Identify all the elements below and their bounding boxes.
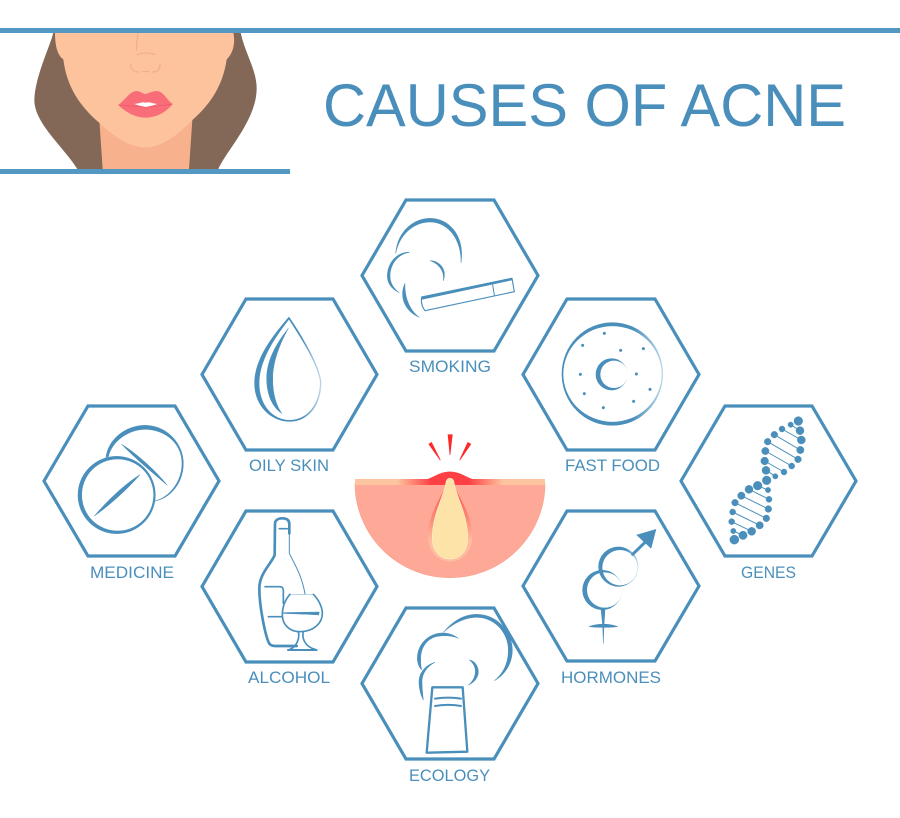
- icon: DNA helix: [729, 417, 805, 544]
- icon: gender symbols: [582, 529, 656, 643]
- icon: donut: [562, 322, 663, 426]
- icon: factory chimney and smoke: [417, 614, 512, 753]
- label: MEDICINE: [90, 563, 174, 582]
- header: portrait of face: [34, 33, 257, 169]
- label: ALCOHOL: [248, 668, 330, 687]
- pus: [432, 478, 468, 559]
- icon: pills: [78, 425, 183, 534]
- label: FAST FOOD: [565, 456, 660, 475]
- header lower rule: [0, 169, 290, 174]
- nose: [131, 33, 160, 72]
- top rule: [0, 28, 900, 33]
- panel: genes: [681, 406, 856, 582]
- panel: alcohol: [202, 511, 377, 687]
- panel: hormones: [523, 511, 699, 687]
- skin body: [355, 483, 545, 578]
- follicle: [428, 477, 472, 562]
- panel: smoking: [362, 200, 538, 376]
- icon: bottle and glass: [259, 518, 322, 650]
- label: HORMONES: [561, 668, 661, 687]
- icon: oil drop: [254, 317, 321, 422]
- skin surface band: [355, 479, 545, 485]
- panel: oily skin: [202, 299, 377, 475]
- central illustration: inflamed pimple cross-section: [355, 434, 545, 578]
- face: [55, 33, 234, 147]
- panel: fast food: [523, 299, 699, 475]
- neck: [99, 120, 192, 169]
- panel: medicine: [44, 406, 219, 582]
- pain rays: [428, 434, 471, 460]
- label: ECOLOGY: [409, 766, 490, 785]
- label: SMOKING: [409, 357, 491, 376]
- hair: [34, 33, 257, 169]
- bump: [427, 472, 473, 479]
- label: GENES: [741, 563, 796, 582]
- panel: ecology: [362, 608, 538, 785]
- icon: cigarette and smoke: [387, 218, 514, 317]
- title: CAUSES OF ACNE: [323, 72, 846, 139]
- label: OILY SKIN: [249, 456, 329, 475]
- lips: [118, 91, 173, 118]
